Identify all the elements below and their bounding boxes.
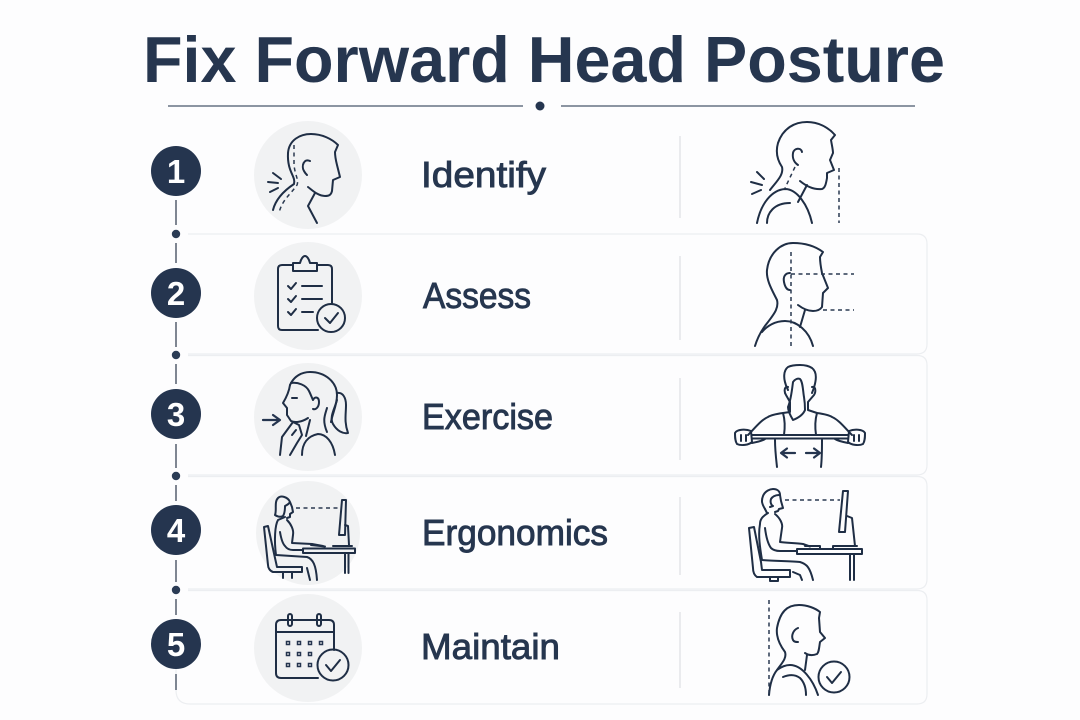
illustration: maintained neutral posture <box>769 600 850 695</box>
illustration: band pull-apart <box>735 365 865 467</box>
title: Fix Forward Head Posture <box>143 23 945 96</box>
label: Maintain: Maintain <box>421 626 560 667</box>
column dividers <box>679 136 681 688</box>
step 4 badge: 4 <box>167 512 186 549</box>
label: Ergonomics: Ergonomics <box>422 512 608 553</box>
illustration: head alignment assessment <box>755 243 854 347</box>
icon: forward head profile <box>254 121 362 229</box>
icon: calendar check <box>254 594 362 702</box>
label: Identify: Identify <box>421 154 546 195</box>
illustration: forward head posture <box>751 122 839 223</box>
step 3 badge <box>151 389 201 439</box>
step 3 badge: 3 <box>167 396 185 433</box>
step 1 badge <box>151 146 201 196</box>
step 5 badge: 5 <box>167 626 185 663</box>
step 2 badge: 2 <box>167 275 185 312</box>
label: Exercise: Exercise <box>422 396 553 437</box>
icon: chin tuck exercise <box>254 363 362 471</box>
step 4 badge <box>151 505 201 555</box>
title divider <box>168 102 915 110</box>
step 1 badge: 1 <box>167 153 185 190</box>
label: Assess: Assess <box>423 275 531 316</box>
icon: seated at desk <box>256 481 360 585</box>
step 2 badge <box>151 268 201 318</box>
row panel outlines <box>176 234 927 704</box>
timeline connector <box>172 200 180 690</box>
icon: clipboard checklist <box>254 242 362 350</box>
step 5 badge <box>151 619 201 669</box>
illustration: ergonomic desk setup <box>749 489 862 581</box>
